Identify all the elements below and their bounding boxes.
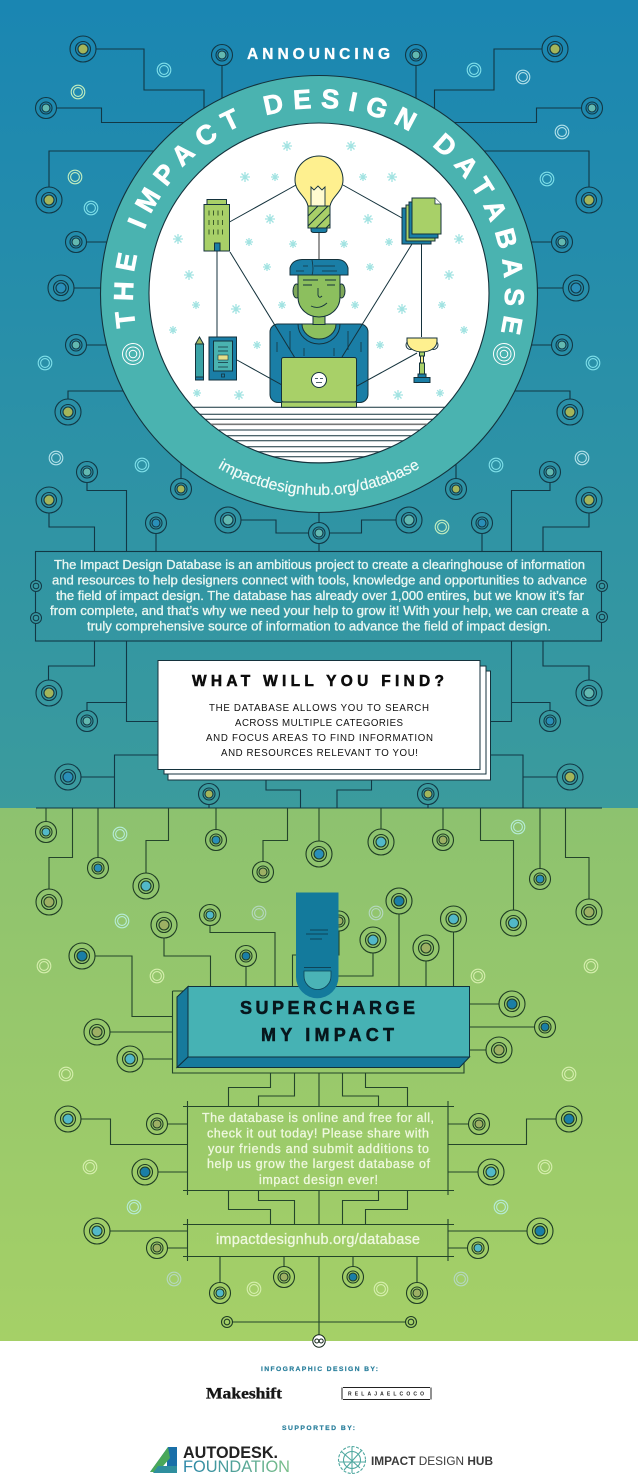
background: white footer bbox=[0, 1341, 638, 1481]
person with laptop bbox=[270, 260, 368, 402]
url frame bbox=[183, 1219, 454, 1261]
panel: url box bbox=[183, 1219, 454, 1261]
globe mark bbox=[338, 1446, 366, 1474]
circuit traces: blue section bbox=[36, 49, 602, 808]
badge ring bbox=[100, 76, 538, 512]
call to action paragraph: check it out today! Please share with bbox=[207, 1126, 429, 1140]
face bbox=[298, 275, 340, 317]
logo: Autodesk Foundation bbox=[150, 1444, 290, 1476]
badge inner white circle bbox=[149, 123, 489, 463]
icon: tablet bbox=[209, 337, 236, 380]
panel: what will you find card bbox=[158, 660, 490, 780]
card body text: THE DATABASE ALLOWS YOU TO SEARCH bbox=[209, 703, 429, 714]
intro paragraph: from complete, and that’s why we need your help to grow it! With your help, we can create a bbox=[50, 604, 589, 618]
footer heading: supporters: SUPPORTED BY: bbox=[282, 1425, 355, 1432]
text box frame bbox=[36, 552, 602, 641]
button label: SUPERCHARGE bbox=[240, 998, 415, 1018]
badge url on arc: impactdesignhub.org/database bbox=[218, 458, 419, 496]
button face bbox=[188, 986, 470, 1057]
stacked paper front bbox=[158, 660, 480, 770]
background: blue section bbox=[0, 0, 638, 808]
button label bbox=[240, 998, 415, 1045]
card heading: WHAT WILL YOU FIND? bbox=[192, 673, 444, 690]
call to action paragraph bbox=[202, 1111, 434, 1187]
intro paragraph: and resources to help designers connect with tools, knowledge and opportunities to advance bbox=[52, 574, 587, 588]
panel: supercharge button bbox=[177, 986, 470, 1068]
logo: Relaja el coco: RELAJAELCOCO bbox=[348, 1392, 424, 1398]
logo: Impact Design Hub: IMPACT DESIGN HUB bbox=[371, 1454, 493, 1468]
card body text: AND RESOURCES RELEVANT TO YOU! bbox=[221, 748, 418, 759]
button bottom bevel bbox=[177, 1057, 470, 1068]
hair bbox=[290, 260, 348, 275]
circuit nodes: blue section bbox=[36, 36, 602, 804]
ears bbox=[293, 284, 300, 298]
logo: Autodesk Foundation: FOUNDATION bbox=[183, 1457, 290, 1476]
url text: impactdesignhub.org/database bbox=[216, 1232, 420, 1248]
heading: announcing: ANNOUNCING bbox=[247, 46, 390, 63]
circuit traces: green section bbox=[46, 808, 589, 1335]
autodesk mark bbox=[150, 1447, 177, 1473]
decorative rings: green section bbox=[37, 820, 598, 1296]
icon: trophy bbox=[406, 338, 438, 382]
card body text: ACROSS MULTIPLE CATEGORIES bbox=[235, 718, 404, 729]
icon: light bulb bbox=[295, 156, 343, 232]
logo: Makeshift: Makeshift bbox=[206, 1386, 283, 1402]
shoulders bbox=[270, 324, 368, 402]
logo: Autodesk Foundation: AUTODESK. bbox=[183, 1444, 278, 1462]
call to action paragraph: your friends and submit additions to bbox=[208, 1142, 429, 1156]
call to action paragraph: The database is online and free for all, bbox=[202, 1111, 434, 1125]
frame small nodes bbox=[30, 580, 608, 624]
badge target ring left bbox=[122, 344, 144, 364]
card body text bbox=[206, 703, 433, 759]
circuit nodes: green section bbox=[36, 822, 602, 1328]
panel: intro text box bbox=[30, 552, 608, 641]
card body text: AND FOCUS AREAS TO FIND INFORMATION bbox=[206, 733, 433, 744]
icon: pencil bbox=[196, 337, 204, 380]
badge title on arc: THE IMPACT DESIGN DATABASE bbox=[114, 89, 524, 335]
call to action paragraph: help us grow the largest database of bbox=[207, 1157, 431, 1171]
text frame bbox=[183, 1101, 454, 1195]
panel: circular badge bbox=[100, 75, 538, 513]
badge target ring right bbox=[494, 344, 514, 364]
icon: bottom terminal node bbox=[313, 1335, 325, 1347]
icon: document stack bbox=[402, 198, 441, 244]
button label: MY IMPACT bbox=[261, 1025, 394, 1045]
decorative rings: blue section bbox=[38, 63, 600, 534]
stacked paper back bbox=[168, 671, 490, 780]
intro paragraph: the field of impact design. The database has already over 1,000 entires, but we know it’s far bbox=[56, 589, 584, 603]
stacked paper middle bbox=[164, 666, 486, 774]
logo: Impact Design Hub bbox=[338, 1446, 493, 1474]
icon: finger pressing button bbox=[296, 892, 338, 998]
intro paragraph: The Impact Design Database is an ambitious project to create a clearinghouse of information bbox=[54, 558, 585, 572]
icon: office building bbox=[204, 200, 230, 251]
background: green section bbox=[0, 808, 638, 1341]
panel: call to action text bbox=[183, 1101, 454, 1195]
intro paragraph bbox=[50, 558, 589, 634]
table lines bbox=[193, 406, 445, 462]
asterisk pattern bbox=[169, 141, 468, 400]
intro paragraph: truly comprehensive source of information to advance the field of impact design. bbox=[87, 620, 551, 634]
logo: Relaja el coco bbox=[342, 1388, 431, 1400]
connecting lines bbox=[217, 185, 422, 386]
button left bevel bbox=[177, 986, 188, 1068]
footer heading: design credit: INFOGRAPHIC DESIGN BY: bbox=[261, 1366, 378, 1373]
call to action paragraph: impact design ever! bbox=[259, 1173, 378, 1187]
laptop bbox=[282, 358, 356, 407]
